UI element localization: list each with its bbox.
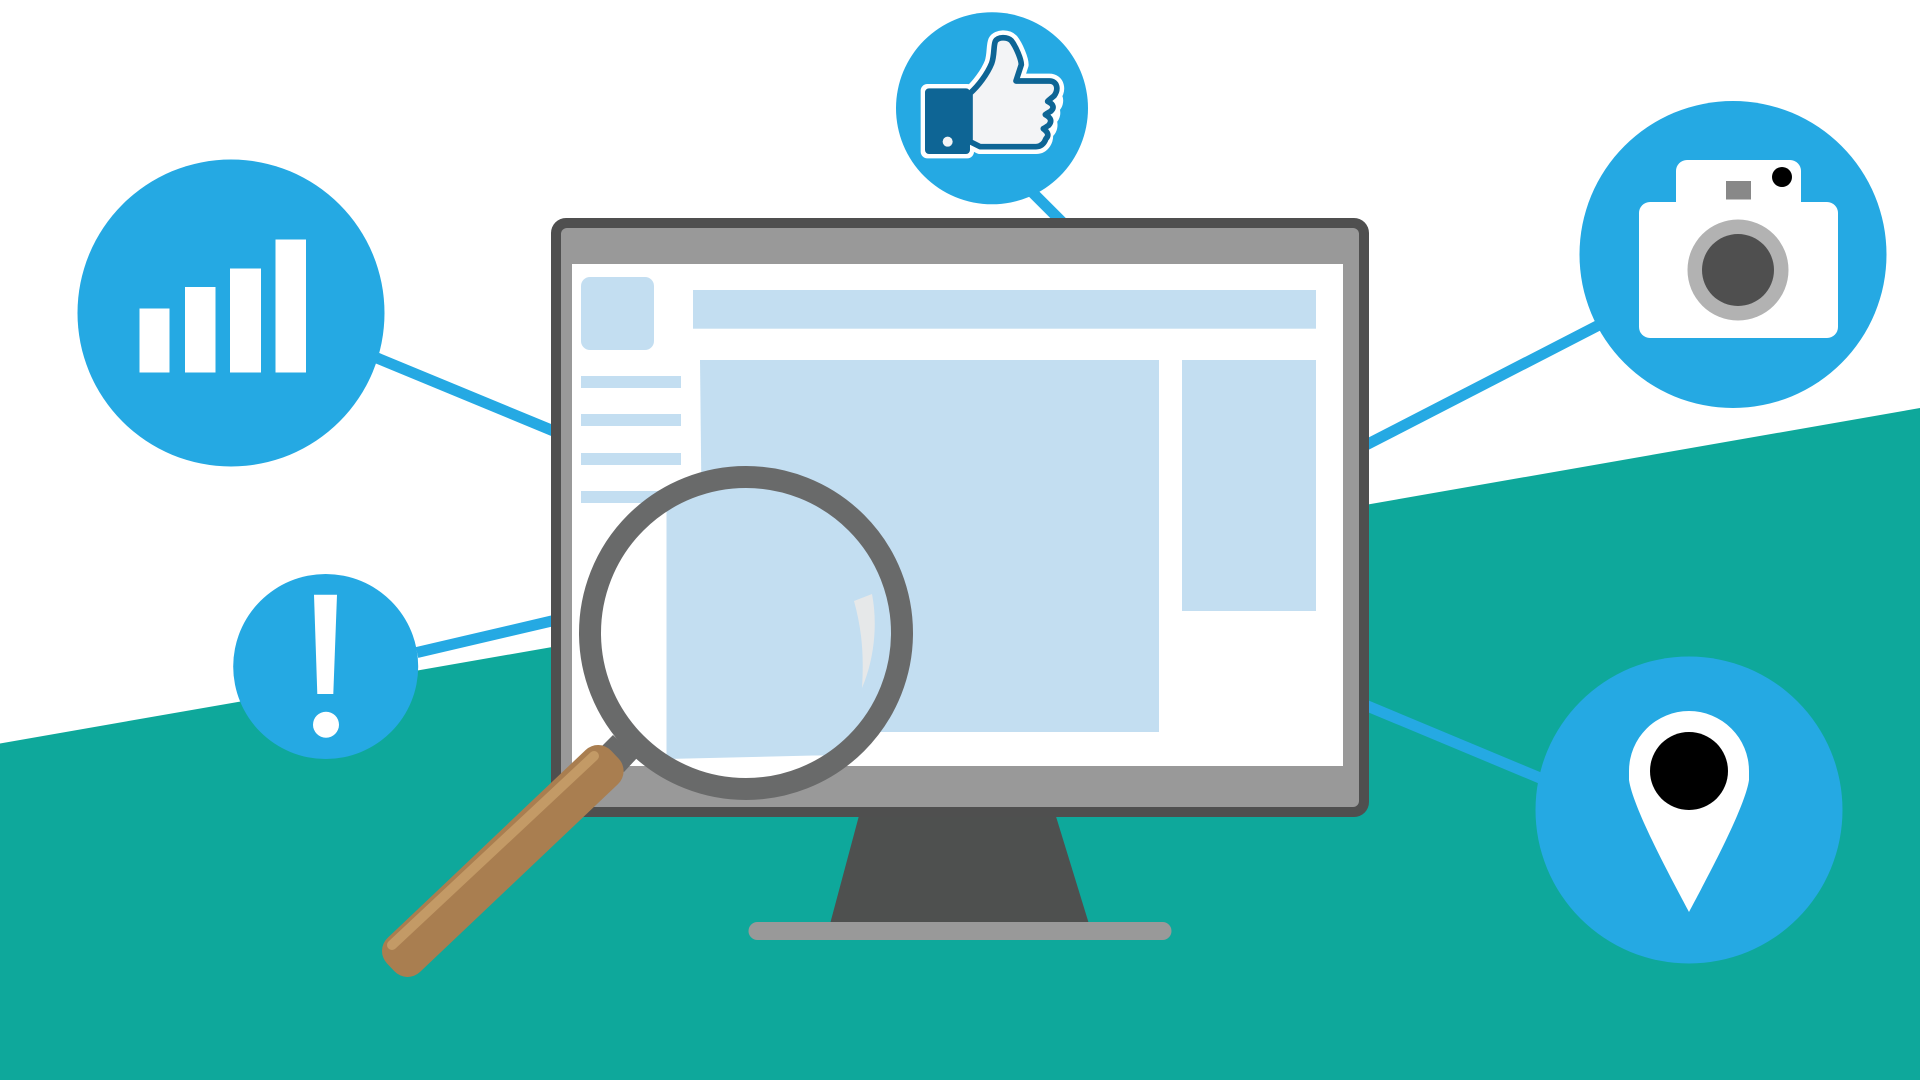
- monitor frame: [551, 218, 1369, 817]
- screen: [572, 264, 1343, 766]
- monitor: [551, 218, 1369, 940]
- handle: [375, 738, 631, 984]
- circle icon: exclamation mark: [233, 574, 418, 759]
- connector lines: [377, 190, 1600, 778]
- circle icon: camera: [1580, 101, 1886, 408]
- magnifying glass: [375, 440, 902, 984]
- circle icon: map pin: [1536, 656, 1842, 964]
- circle icon: bar chart: [78, 160, 384, 466]
- lens ring: [590, 477, 902, 789]
- circle icon: thumbs up: [896, 12, 1088, 204]
- lens: [666, 495, 875, 778]
- lens connector: [598, 735, 637, 772]
- monitor stand: [748, 810, 1172, 940]
